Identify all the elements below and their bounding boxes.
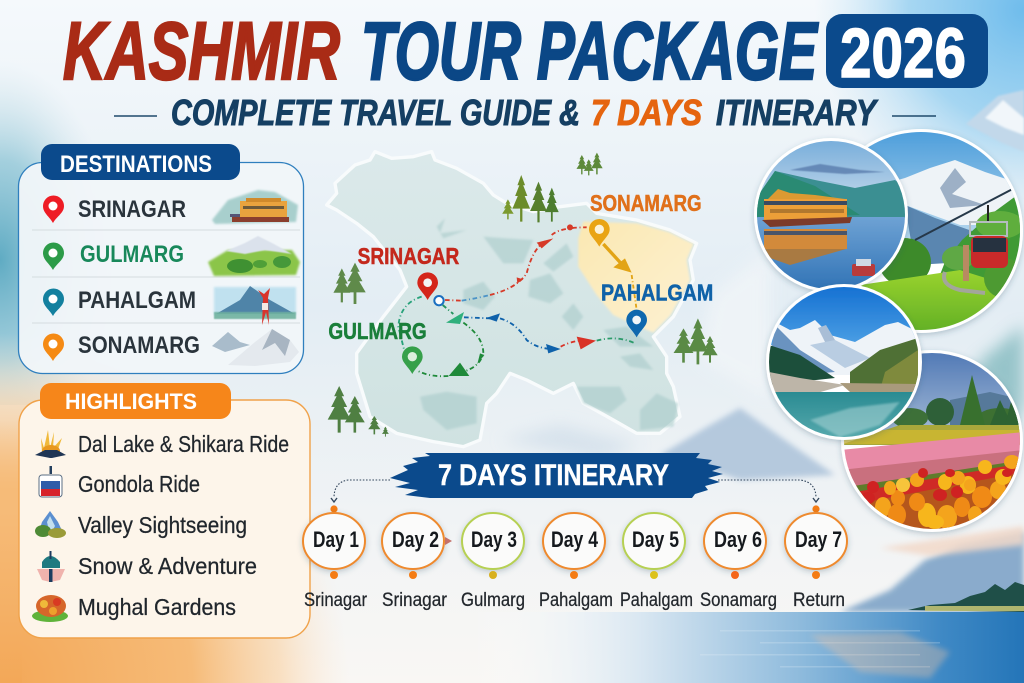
map label: Gulmarg: GULMARG	[328, 318, 427, 344]
panel: highlights	[19, 383, 310, 638]
map landmass	[327, 152, 697, 447]
subtitle: 7 DAYS	[591, 92, 702, 133]
Sonamarg highlighted zone	[578, 222, 693, 333]
tree cluster: north east	[576, 153, 603, 175]
year badge: 2026	[840, 14, 966, 92]
destination row: Sonamarg	[43, 329, 299, 366]
highlight: Valley Sightseeing: Valley Sightseeing	[78, 512, 247, 538]
step: Day 4 Pahalgam: Day 4	[551, 527, 599, 552]
highlight: Mughal Gardens: Mughal Gardens	[78, 594, 236, 620]
step: Day 6 Sonamarg: Sonamarg	[700, 590, 777, 611]
dotted connector: banner to Day 1	[331, 480, 390, 502]
step: Day 4 Pahalgam	[539, 513, 613, 611]
step: Day 7 Return	[785, 505, 847, 611]
route: Srinagar to Sonamarg	[445, 224, 587, 301]
tree cluster: south west	[328, 386, 389, 437]
step: Day 5 Pahalgam: Pahalgam	[620, 590, 693, 611]
map label: Pahalgam: PAHALGAM	[601, 280, 713, 306]
step: Day 3 Gulmarg	[461, 513, 525, 611]
destination row: Pahalgam	[43, 286, 296, 325]
step: Day 1 Srinagar: Day 1	[313, 527, 359, 552]
destinations header	[41, 144, 240, 180]
gondola cabin	[970, 205, 1008, 268]
destination row: Srinagar: SRINAGAR	[78, 196, 186, 223]
tree cluster: east	[674, 318, 718, 364]
pin: Srinagar	[417, 272, 438, 300]
thumbnail: snowy peaks	[212, 329, 299, 366]
route: Sonamarg to Pahalgam	[603, 244, 637, 310]
small boat	[852, 259, 875, 276]
route: Srinagar to Gulmarg	[398, 297, 484, 376]
map label: Srinagar: SRINAGAR	[358, 243, 459, 269]
itinerary steps	[303, 505, 847, 611]
step: Day 3 Gulmarg: Gulmarg	[461, 590, 525, 611]
tree cluster: north	[502, 175, 559, 222]
panel: destinations	[18, 144, 304, 374]
step: Day 6 Sonamarg: Day 6	[714, 527, 762, 552]
step: Day 1 Srinagar: Srinagar	[304, 590, 368, 611]
gondola cable	[914, 189, 1012, 241]
highlights header	[40, 383, 231, 419]
step: Day 5 Pahalgam	[620, 513, 693, 611]
step: Day 7 Return: Return	[793, 590, 845, 611]
highlight: Gondola Ride	[39, 466, 200, 497]
thumbnail: green valley	[208, 236, 300, 276]
pin: Gulmarg	[402, 346, 423, 374]
map terrain patches	[420, 218, 678, 430]
subtitle: COMPLETE TRAVEL GUIDE &	[171, 92, 580, 133]
step: Day 5 Pahalgam: Day 5	[632, 527, 679, 552]
thumbnail: blue mountain	[214, 286, 296, 325]
photo: snow mountains and river	[765, 284, 925, 440]
photo: gondola over green meadow	[861, 128, 1024, 338]
step: Day 6 Sonamarg	[700, 513, 777, 611]
pin: Pahalgam	[626, 310, 647, 337]
destinations header: DESTINATIONS	[60, 151, 212, 178]
thumbnail: houseboat	[212, 190, 298, 224]
step: Day 2 Srinagar: Srinagar	[382, 590, 448, 611]
step: Day 2 Srinagar: Day 2	[392, 527, 439, 552]
tree cluster: west	[333, 263, 366, 304]
subtitle: ITINERARY	[716, 92, 878, 133]
title words: Tour Package: TOUR PACKAGE	[361, 6, 819, 97]
photo: houseboat on lake	[754, 138, 910, 292]
route: Gulmarg to Pahalgam	[464, 313, 635, 353]
highlight: Mughal Gardens	[32, 594, 236, 622]
itinerary banner: 7 DAYS ITINERARY	[438, 459, 669, 492]
step: Day 1 Srinagar	[303, 505, 368, 611]
itinerary banner	[390, 453, 723, 498]
destination row: Sonamarg: SONAMARG	[78, 332, 200, 359]
highlight: Snow and Adventure	[37, 551, 257, 582]
dotted connector: banner to Day 7	[718, 480, 819, 502]
destination row: Gulmarg: GULMARG	[80, 241, 184, 268]
map label: Sonamarg: SONAMARG	[590, 190, 702, 216]
title	[63, 6, 988, 97]
title word: Kashmir: KASHMIR	[63, 6, 340, 97]
subtitle	[114, 92, 936, 133]
tulips	[875, 455, 1020, 529]
destination row: Gulmarg	[43, 236, 300, 276]
highlights header: HIGHLIGHTS	[65, 389, 197, 414]
map of Kashmir with routes	[327, 152, 718, 447]
marker: start point	[434, 296, 444, 305]
step: Day 3 Gulmarg: Day 3	[471, 527, 517, 552]
step: Day 4 Pahalgam: Pahalgam	[539, 590, 613, 611]
pin: Sonamarg	[589, 219, 610, 247]
highlight: Snow and Adventure: Snow & Adventure	[78, 553, 257, 579]
highlight: Dal Lake and Shikara Ride: Dal Lake & Shikara Ride	[78, 431, 289, 457]
destination row: Pahalgam: PAHALGAM	[78, 287, 196, 314]
photo: tulip garden	[840, 350, 1024, 532]
highlight: Dal Lake and Shikara Ride	[35, 430, 289, 458]
destination row: Srinagar	[43, 190, 298, 224]
step: Day 2 Srinagar	[382, 513, 452, 611]
step: Day 7 Return: Day 7	[795, 527, 842, 552]
highlight: Gondola Ride: Gondola Ride	[78, 471, 200, 497]
